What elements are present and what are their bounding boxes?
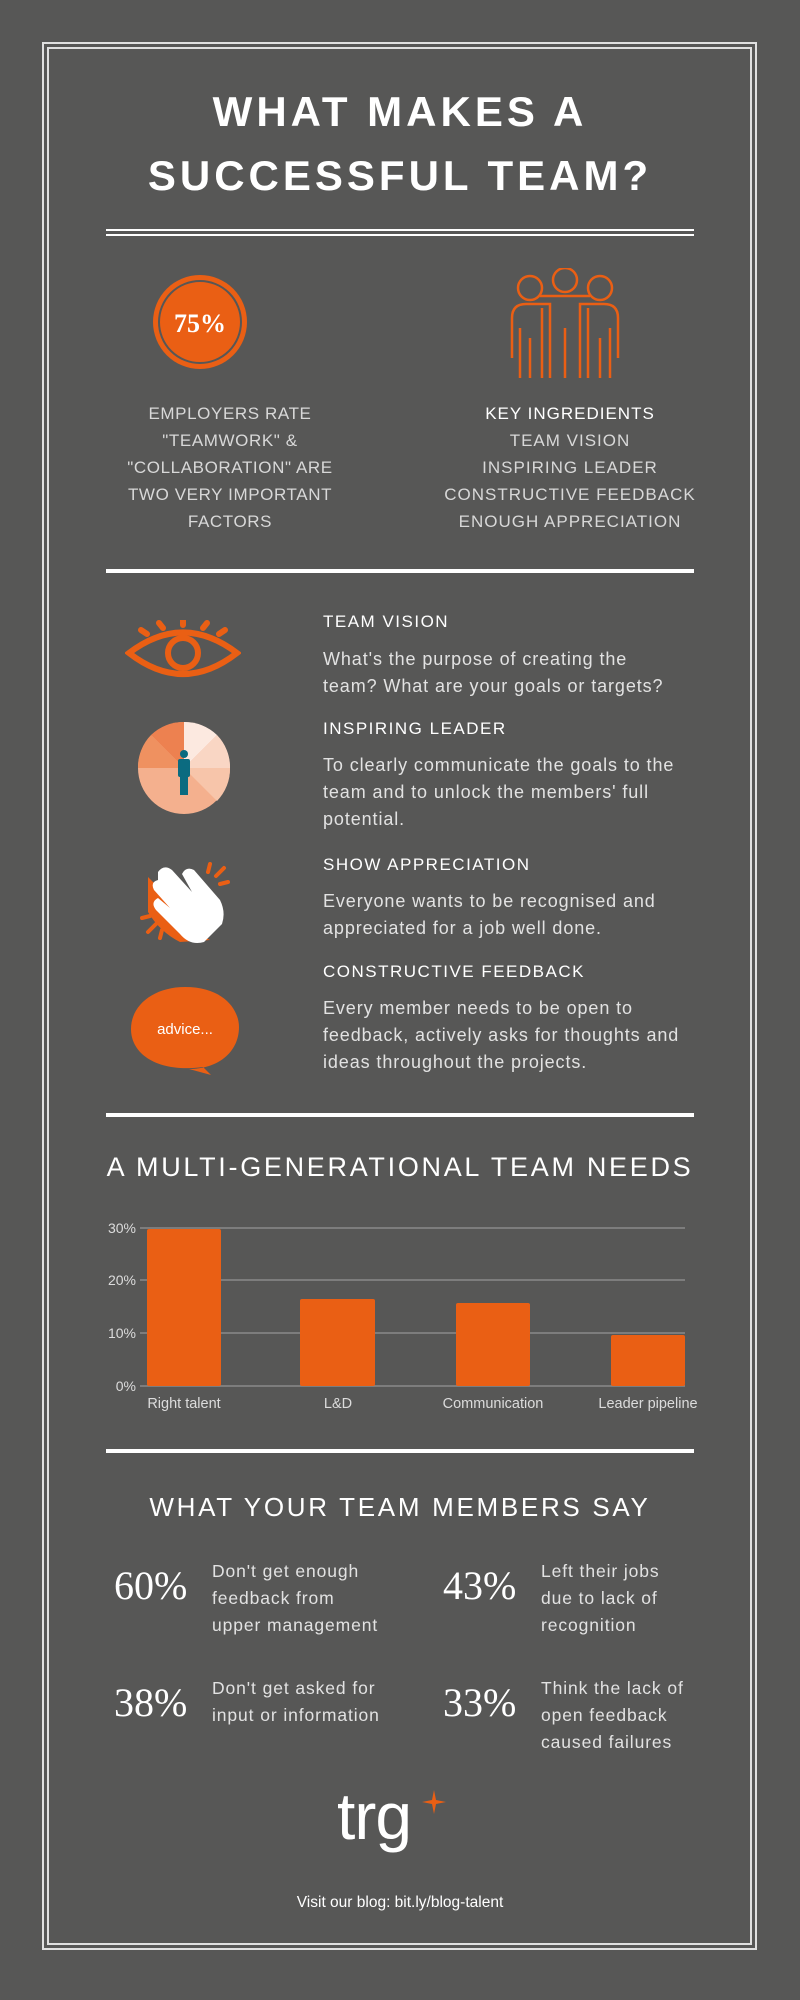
bar chart: L&D [324,1396,352,1412]
item: show appreciation: appreciated for a job well done. [323,918,602,938]
item: constructive feedback: ideas throughout the projects. [323,1052,587,1072]
bar chart: Leader pipeline [598,1396,698,1412]
item: constructive feedback: Every member needs to be open to [323,998,633,1018]
item: inspiring leader [323,719,674,829]
bar chart [108,1220,698,1412]
item: inspiring leader: team and to unlock the members' full [323,782,649,802]
text: open feedback [541,1705,668,1725]
item: inspiring leader: INSPIRING LEADER [323,719,507,738]
text: 43% [443,1563,516,1608]
text: recognition [541,1615,637,1635]
text: upper management [212,1615,378,1635]
text: 60% [114,1563,187,1608]
stat text: employers: EMPLOYERS RATE [148,404,312,423]
text: 38% [114,1680,187,1725]
footer text: Visit our blog: bit.ly/blog-talent [297,1894,503,1911]
key ingredients text: INSPIRING LEADER [482,458,658,477]
stat: 60% [114,1561,378,1635]
text: Don't get asked for [212,1678,375,1698]
stat: 38% [114,1678,380,1725]
item: team vision: TEAM VISION [323,612,449,631]
bar chart: 10% [108,1325,136,1341]
icon: people [510,268,620,378]
icon: 75% circle: 75% [174,309,226,338]
stat text: employers: "TEAMWORK" & [162,431,298,450]
icon: advice speech bubble: advice... [157,1021,213,1038]
key ingredients text: KEY INGREDIENTS [485,404,655,423]
logo: trg [337,1779,446,1853]
icon: advice speech bubble [131,987,239,1075]
key ingredients text: TEAM VISION [510,431,630,450]
item: show appreciation: Everyone wants to be recognised and [323,891,656,911]
text: Left their jobs [541,1561,660,1581]
heading: what your team members say: WHAT YOUR TEAM MEMBERS SAY [149,1492,651,1522]
item: team vision: team? What are your goals or targets? [323,676,663,696]
item: constructive feedback: feedback, actively asks for thoughts and [323,1025,679,1045]
stat: 43% [443,1561,660,1635]
text: due to lack of [541,1588,658,1608]
text: Don't get enough [212,1561,359,1581]
item: inspiring leader: potential. [323,809,405,829]
icon: clapping hands [140,862,230,943]
bar chart: Right talent [147,1396,221,1412]
heading: multi-generational: A MULTI-GENERATIONAL TEAM NEEDS [107,1152,693,1182]
bar chart: 30% [108,1220,136,1236]
item: inspiring leader: To clearly communicate the goals to the [323,755,674,775]
stat text: employers: FACTORS [188,512,272,531]
stat text: employers: TWO VERY IMPORTANT [128,485,332,504]
item: show appreciation: SHOW APPRECIATION [323,855,530,874]
bar chart: 0% [116,1378,136,1394]
item: show appreciation [323,855,656,938]
text: 33% [443,1680,516,1725]
item: constructive feedback: CONSTRUCTIVE FEEDBACK [323,962,585,981]
bar chart: Communication [443,1396,543,1412]
item: team vision [323,612,663,696]
icon: 75% circle [153,275,247,369]
text: feedback from [212,1588,335,1608]
icon: eye [125,620,241,678]
item: constructive feedback [323,962,679,1072]
stat text: employers: "COLLABORATION" ARE [127,458,333,477]
logo: trg: trg [337,1779,411,1853]
key ingredients text [444,404,696,531]
text: caused failures [541,1732,672,1752]
stat text: employers [127,404,333,531]
icon: leader wheel [138,722,230,814]
item: team vision: What's the purpose of creating the [323,649,627,669]
title: WHAT MAKES A [213,88,587,135]
bar chart: 20% [108,1272,136,1288]
title: SUCCESSFUL TEAM? [148,152,652,199]
key ingredients text: CONSTRUCTIVE FEEDBACK [444,485,696,504]
text: Think the lack of [541,1678,684,1698]
key ingredients text: ENOUGH APPRECIATION [459,512,681,531]
stat: 33% [443,1678,684,1752]
title [148,88,652,199]
text: input or information [212,1705,380,1725]
